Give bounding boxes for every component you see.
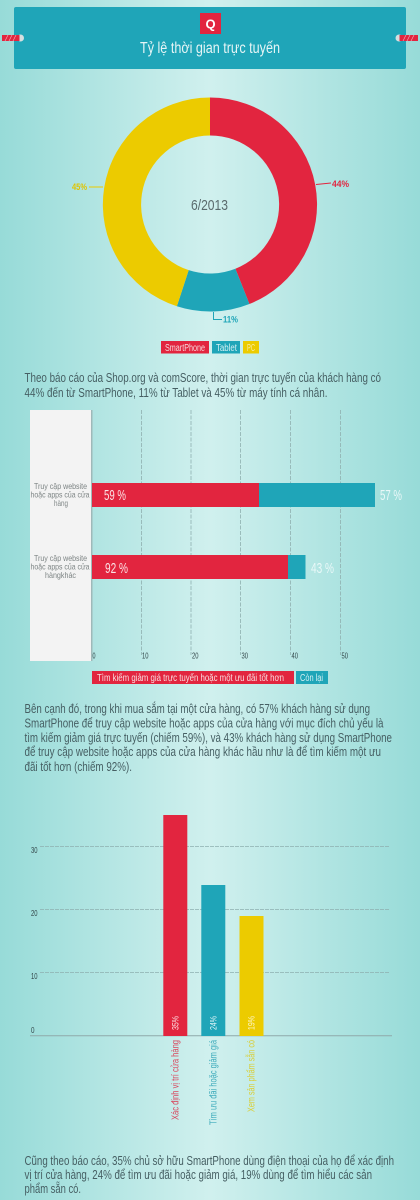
category panel: Truy cập website	[34, 553, 87, 563]
label: 11%: 11%	[223, 314, 238, 326]
y axis labels	[31, 846, 38, 1035]
center label: 6/2013	[191, 197, 228, 214]
header banner	[2, 7, 418, 69]
title: Tỷ lệ thời gian trực tuyến	[140, 40, 280, 57]
legend: remaining	[296, 671, 328, 684]
x axis labels: 0	[92, 652, 96, 660]
x axis labels: 40	[292, 652, 298, 660]
text block: store usage: đãi tốt hơn (chiếm 92%).	[24, 760, 132, 774]
bar: store location 35%: 35%	[170, 1016, 180, 1030]
label: 45%: 45%	[72, 182, 87, 192]
legend: Tablet: Tablet	[216, 343, 237, 354]
text block: store usage	[24, 701, 392, 774]
y axis labels: 0	[31, 1026, 35, 1035]
icon: Q logo	[200, 13, 221, 34]
bar: store location 35%	[163, 815, 187, 1120]
bar: product availability 19%: 19%	[246, 1016, 256, 1030]
icon: Q logo: Q	[205, 16, 216, 32]
category panel	[30, 410, 92, 661]
vertical bar chart	[30, 815, 392, 1125]
bar chart legend	[92, 671, 328, 684]
slice: Tablet 11%	[177, 269, 249, 312]
icon: left rope	[2, 34, 24, 42]
bar: store apps: 57 %	[380, 487, 402, 504]
label: 44%: 44%	[332, 179, 349, 190]
icon: right rope	[396, 34, 418, 42]
x axis labels: 10	[142, 652, 149, 660]
text block: intro: 44% đến từ SmartPhone, 11% từ Tablet và 45% từ máy tính cá nhân.	[24, 386, 328, 400]
slice: PC 45%	[103, 97, 210, 306]
bar: deals 24%: 24%	[208, 1016, 218, 1030]
bar: other store apps: 92 %	[105, 560, 128, 577]
category panel: Truy cập website	[34, 481, 87, 491]
slice: SmartPhone 44%	[210, 97, 317, 304]
category panel: hàngkhác	[45, 570, 77, 580]
bar: store apps	[92, 483, 402, 507]
bar: product availability 19%: Xem sản phẩm sẵn có	[244, 1040, 258, 1112]
legend: remaining: Còn lại	[300, 673, 323, 684]
bar: store apps: 59 %	[104, 487, 126, 504]
y axis labels: 10	[31, 972, 38, 981]
label: 11%	[214, 312, 238, 326]
x axis labels: 50	[342, 652, 348, 660]
donut legend	[161, 341, 259, 354]
legend: SmartPhone: SmartPhone	[165, 343, 205, 354]
bar: other store apps	[92, 555, 334, 579]
bar: deals 24%: Tìm ưu đãi hoặc giảm giá	[208, 1040, 220, 1125]
text block: closing	[24, 1154, 394, 1196]
horizontal bar chart	[30, 410, 402, 661]
x axis labels: 30	[242, 652, 248, 660]
x axis labels	[92, 652, 348, 660]
text block: closing: phẩm sẵn có.	[24, 1181, 81, 1196]
donut chart	[72, 97, 349, 325]
label: 44%	[316, 179, 349, 190]
bar: deals 24%	[201, 885, 225, 1125]
label: 45%	[72, 182, 103, 192]
category panel: hoặc apps của cửa	[30, 490, 90, 500]
category panel: hàng	[54, 498, 68, 508]
bar: store location 35%: Xác định vị trí cửa hàng	[170, 1040, 182, 1120]
text block: intro	[24, 371, 381, 400]
category panel: hoặc apps của cửa	[30, 562, 90, 572]
bar: product availability 19%	[240, 916, 264, 1112]
bar: other store apps: 43 %	[311, 560, 334, 577]
y axis labels: 30	[31, 846, 38, 855]
y axis labels: 20	[31, 909, 38, 918]
legend: discount search: Tìm kiếm giảm giá trực tuyến hoặc một ưu đãi tốt hơn	[97, 672, 284, 684]
x axis labels: 20	[192, 652, 199, 660]
legend: PC: PC	[247, 343, 255, 354]
